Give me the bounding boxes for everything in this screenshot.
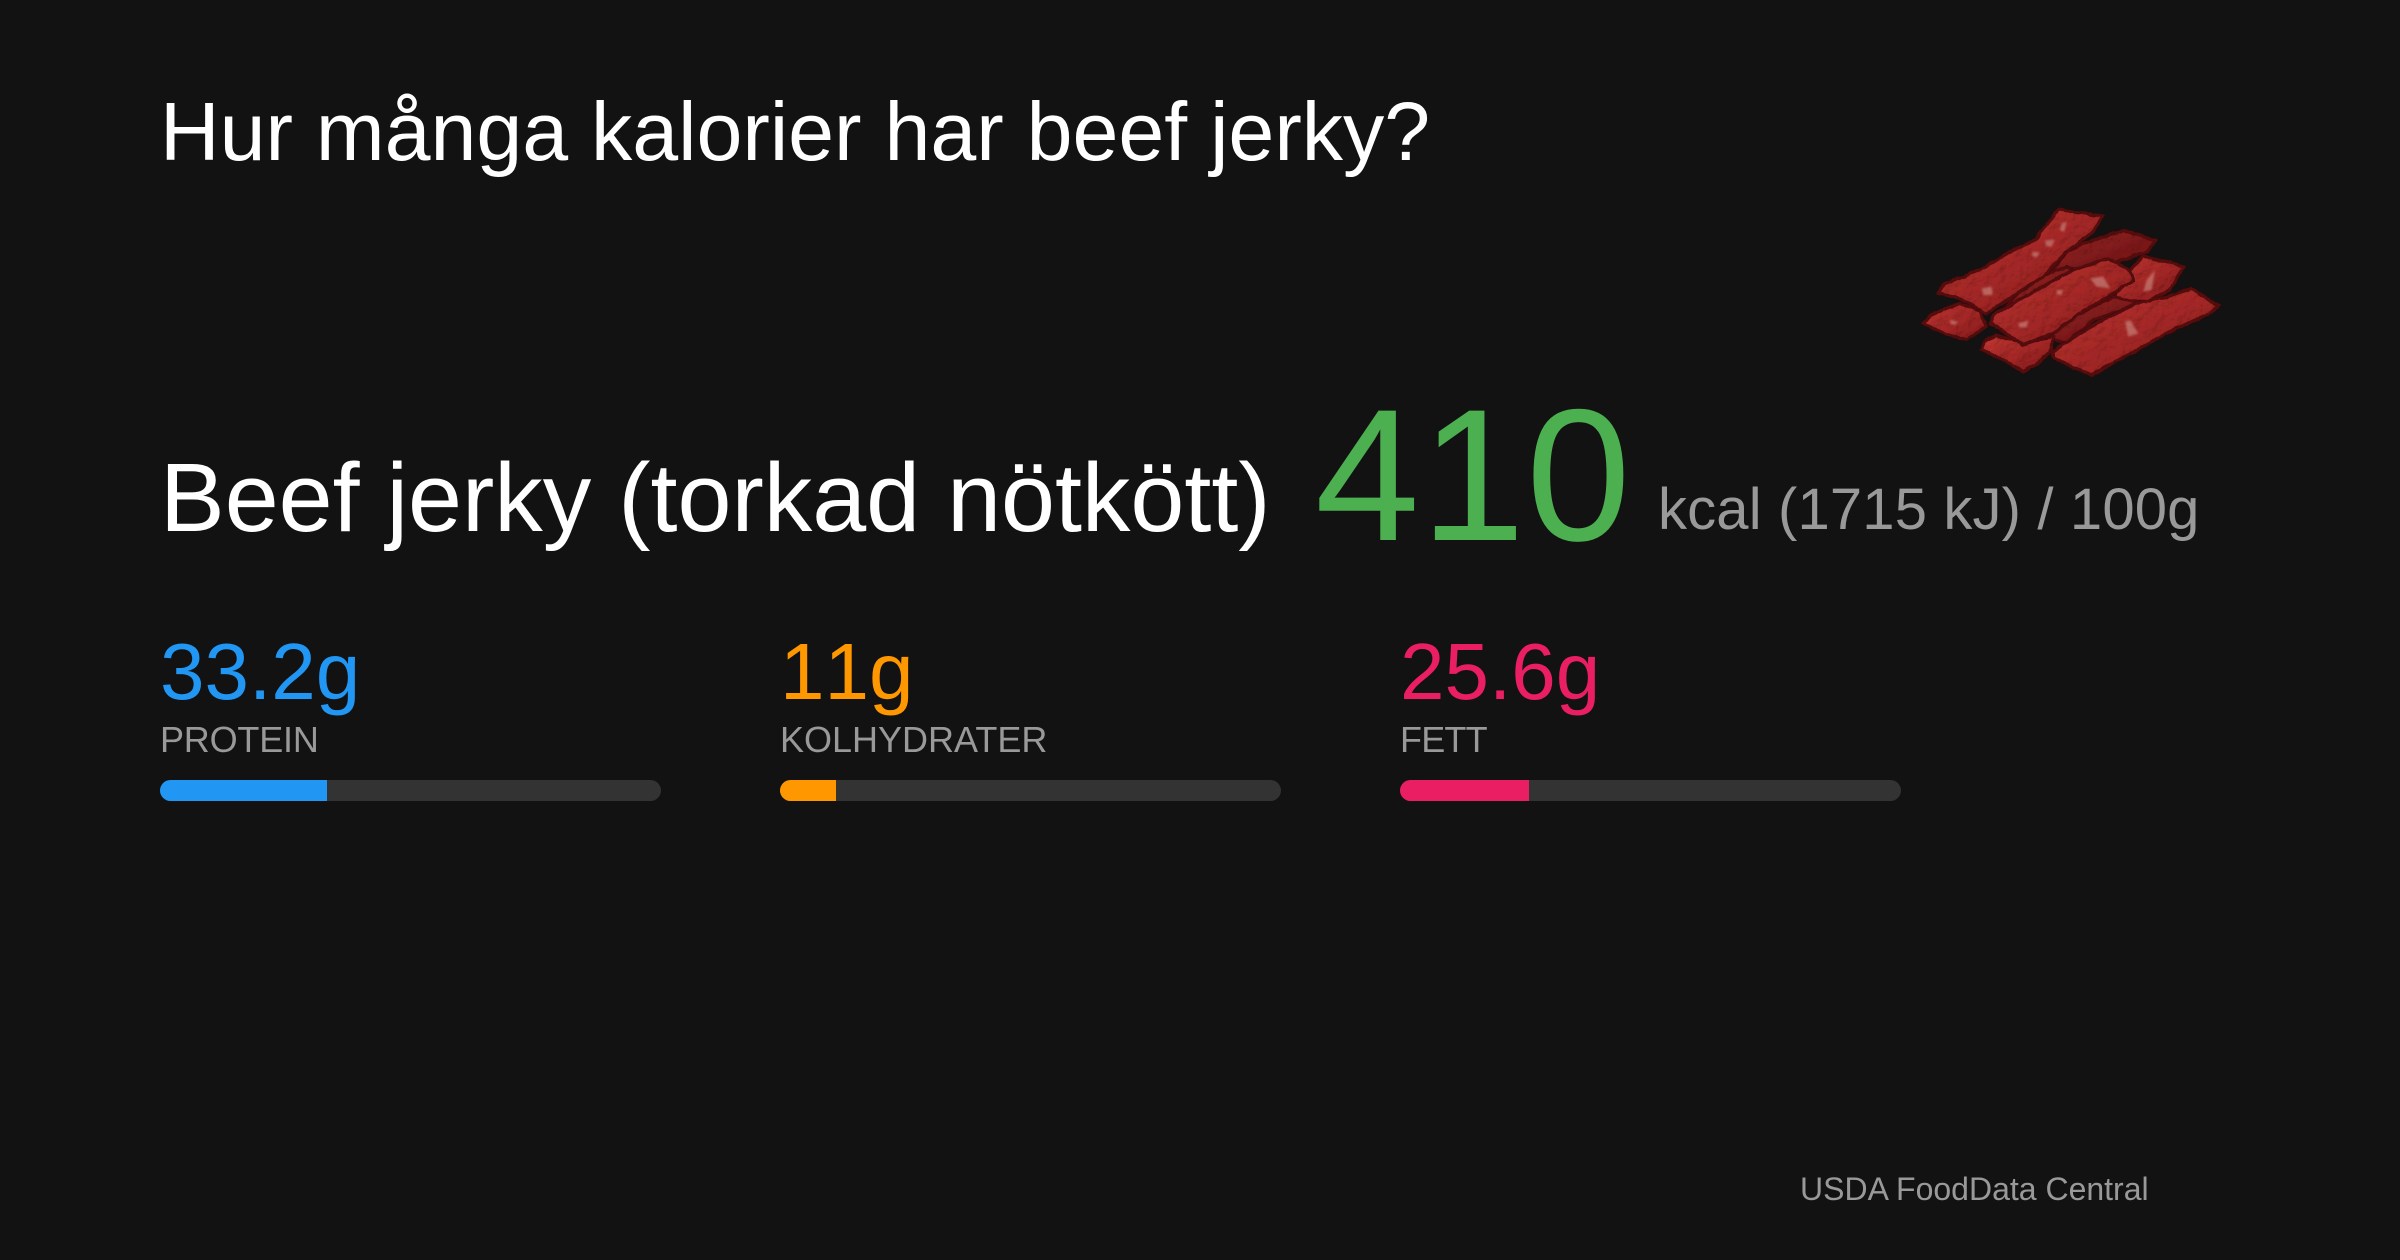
carbohydrate label: KOLHYDRATER [780,719,1047,760]
carbohydrate value: 11g [780,627,913,716]
carbohydrate bar [780,780,1281,801]
fat label: FETT [1400,719,1487,760]
fat bar [1400,780,1901,801]
source credit: USDA FoodData Central [1800,1171,2149,1207]
fat value: 25.6g [1400,627,1600,716]
protein bar [160,780,661,801]
protein value: 33.2g [160,627,360,716]
protein label: PROTEIN [160,719,319,760]
heading: food name: Beef jerky (torkad nötkött) [160,443,1271,552]
calorie number: 410 [1315,370,1632,580]
title: Hur många kalorier har beef jerky? [160,86,1430,178]
calorie unit: kcal (1715 kJ) / 100g [1658,477,2200,542]
icon: beef jerky strips [1921,208,2221,378]
